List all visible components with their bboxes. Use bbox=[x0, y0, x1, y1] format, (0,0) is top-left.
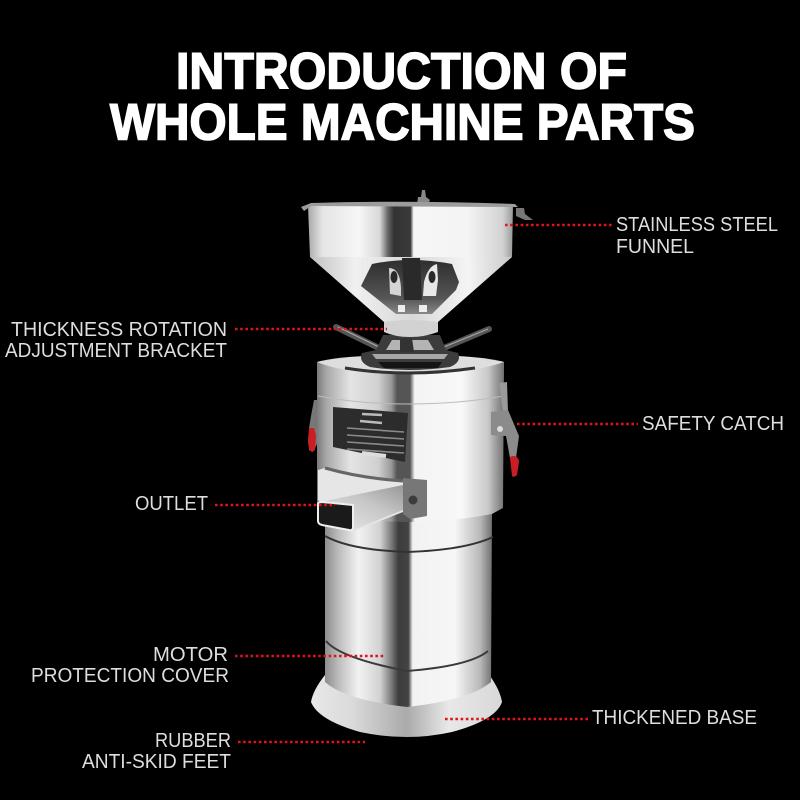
title: WHOLE MACHINE PARTS bbox=[110, 94, 695, 150]
label: rubber anti-skid feet: RUBBER bbox=[155, 730, 231, 752]
lower motor cover bbox=[325, 510, 492, 707]
label: motor protection cover: PROTECTION COVER bbox=[31, 665, 229, 687]
funnel rim knob bbox=[417, 190, 430, 204]
left safety catch bbox=[308, 400, 317, 452]
label: stainless steel funnel: FUNNEL bbox=[616, 236, 694, 258]
rim clip bbox=[516, 208, 533, 220]
rating plate bbox=[333, 407, 408, 462]
label: safety catch: SAFETY CATCH bbox=[642, 413, 784, 435]
cone inner reflection bbox=[361, 258, 459, 314]
collar bbox=[361, 335, 459, 370]
funnel cylinder bbox=[308, 205, 513, 257]
handles bbox=[336, 327, 489, 349]
label: thickness rotation adjustment bracket bbox=[5, 319, 387, 362]
label: stainless steel funnel: STAINLESS STEEL bbox=[616, 214, 778, 236]
adjustment ring bbox=[384, 320, 438, 337]
right safety catch bbox=[491, 382, 519, 477]
outlet spout bbox=[318, 468, 427, 532]
base skirt bbox=[311, 675, 502, 737]
title bbox=[110, 42, 695, 150]
machine illustration bbox=[301, 190, 533, 737]
label: stainless steel funnel bbox=[505, 214, 778, 258]
label: thickness rotation adjustment bracket: THICKNESS ROTATION bbox=[11, 319, 227, 341]
label: motor protection cover bbox=[31, 644, 385, 687]
label: rubber anti-skid feet: ANTI-SKID FEET bbox=[82, 751, 231, 773]
upper housing bbox=[317, 355, 504, 522]
label: rubber anti-skid feet bbox=[82, 730, 365, 773]
label: thickness rotation adjustment bracket: ADJUSTMENT BRACKET bbox=[5, 340, 227, 362]
funnel cone bbox=[310, 257, 512, 322]
cover groove bbox=[326, 641, 488, 671]
funnel rim bbox=[301, 202, 518, 211]
housing lower groove bbox=[325, 536, 493, 552]
label: thickened base: THICKENED BASE bbox=[592, 707, 757, 729]
label: outlet: OUTLET bbox=[135, 493, 208, 515]
label: motor protection cover: MOTOR bbox=[153, 644, 228, 666]
title: INTRODUCTION OF bbox=[176, 42, 627, 100]
housing top shoulder bbox=[317, 356, 504, 374]
